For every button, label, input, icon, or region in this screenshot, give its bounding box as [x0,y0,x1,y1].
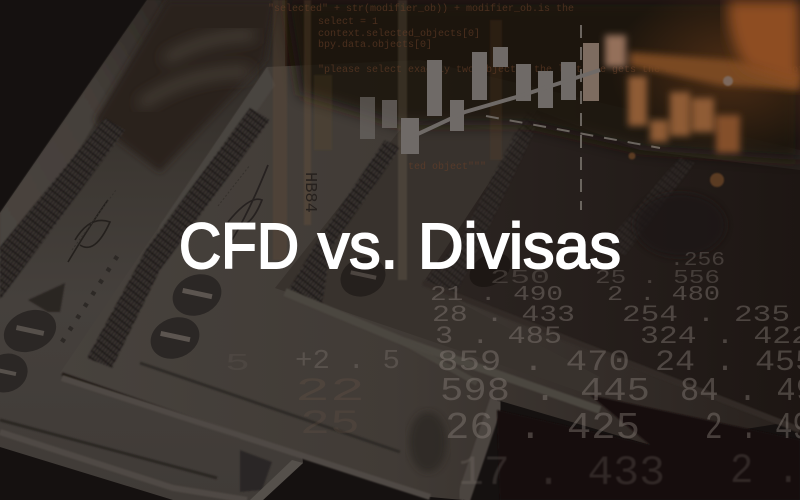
digital price numbers: 24 . 455 [655,346,800,380]
digital price numbers: 21 . 490 [430,284,563,307]
code text overlay: "selected" + str(modifier_ob)) + modifier_ob.is the [268,3,574,15]
digital price numbers: 324 . 422 [640,322,800,351]
dashed guide lines [486,25,660,210]
digital price numbers: 250 [490,267,550,289]
digital price numbers: .256 [670,249,725,271]
code text overlay: context.selected_objects[0] [318,28,480,40]
bill: center right [275,120,600,410]
title: Divisas [418,210,621,282]
orange glow [610,0,800,155]
digital price numbers [225,249,800,497]
digital price numbers: 22 [295,373,365,410]
chart dots [628,76,733,187]
digital price numbers: 5 [225,351,250,378]
orange blurred candles [605,35,800,153]
digital price numbers: 17 . 433 [458,449,665,497]
digital price numbers: 859 . 470 [437,346,630,380]
bill: far right [423,110,800,500]
digital price numbers: 26 . 425 [445,407,640,450]
title: CFD [179,210,299,282]
digital price numbers: 3 . 485 [435,322,562,351]
digital price numbers: 254 . 235 [622,302,790,328]
candlestick chart [360,43,600,154]
bill: far left [0,0,303,500]
code text overlay: select = 1 [318,16,378,28]
dark chart backdrop [285,0,800,160]
code text overlay: ted object""" [408,161,486,173]
title: vs. [318,210,398,282]
code text overlay: "please select exactly two objects, the last one gets the modifier unless its not" [318,64,800,76]
code text overlay: bpy.data.objects[0] [318,39,432,51]
serial number: HB84 [300,172,319,213]
digital price numbers: 25 [300,406,360,444]
digital price numbers: 25 . 556 [595,267,720,289]
digital price numbers: +2 . 5 [295,347,400,377]
orange blob top right [727,0,800,86]
digital price numbers: 2 . 480 [607,284,720,307]
digital price numbers: 598 . 445 [440,373,650,410]
digital price numbers: 28 . 433 [432,302,575,328]
code text overlay [268,3,800,173]
chart overlay: vertical stripes [273,0,502,280]
